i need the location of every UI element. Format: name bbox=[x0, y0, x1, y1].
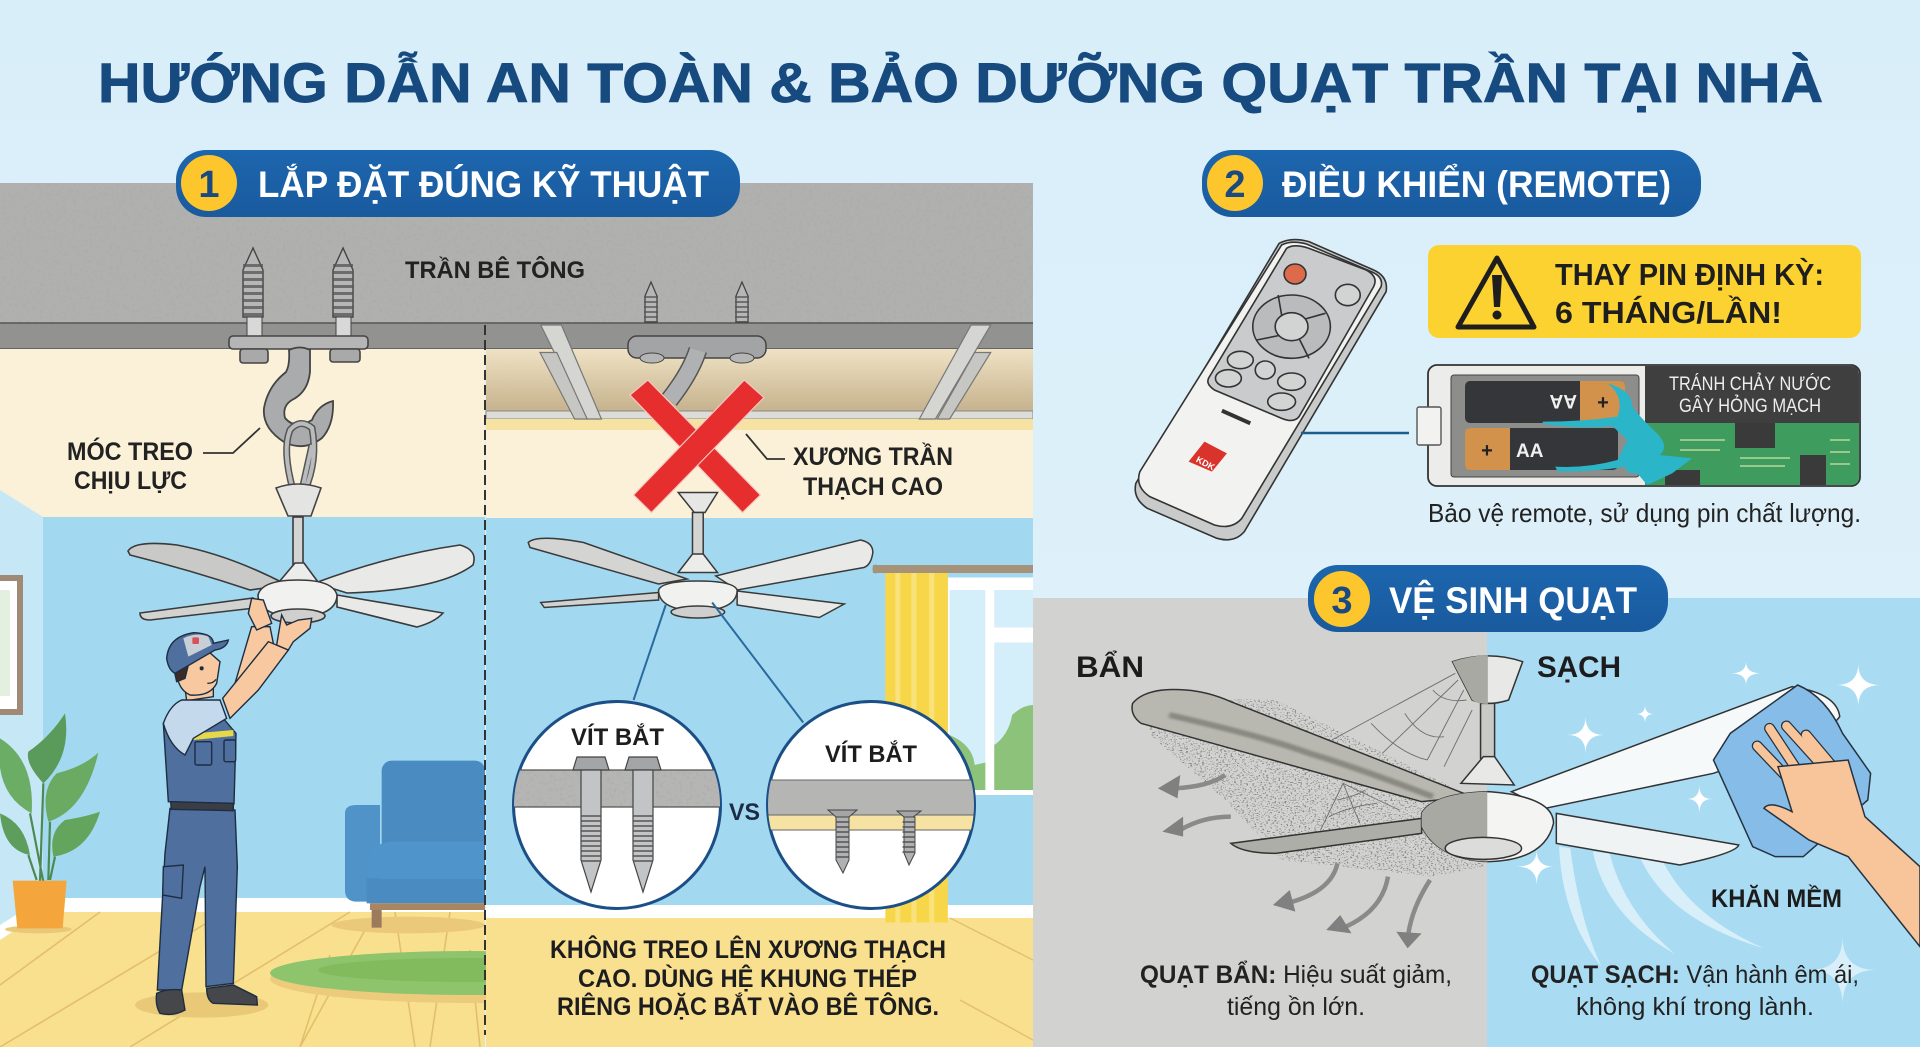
right room: wrong installation bbox=[486, 349, 1033, 1047]
label: screw left: VÍT BẮT bbox=[571, 723, 664, 751]
battery compartment illustration: AA bbox=[1549, 390, 1577, 411]
heading pill 2: ĐIỀU KHIỂN (REMOTE) bbox=[1282, 163, 1671, 205]
bracket and screws on gypsum ceiling bbox=[628, 282, 766, 363]
label: concrete ceiling: TRẦN BÊ TÔNG bbox=[405, 256, 585, 284]
detail circle: screws into concrete bbox=[510, 702, 725, 908]
callout: replace batteries: 6 THÁNG/LẦN! bbox=[1555, 295, 1782, 330]
caption: dirty fan: QUẠT BẨN: Hiệu suất giảm, bbox=[1140, 960, 1452, 989]
heading pill 2: 2 bbox=[1224, 164, 1246, 206]
dirty side background bbox=[1033, 598, 1487, 1047]
callout: replace batteries bbox=[1428, 245, 1861, 338]
remote logo text: KDK bbox=[1194, 454, 1217, 473]
battery compartment illustration: + bbox=[1481, 440, 1493, 462]
sparkles bbox=[1517, 662, 1881, 1005]
warning caption: RIÊNG HOẶC BẮT VÀO BÊ TÔNG. bbox=[557, 991, 939, 1021]
concrete ceiling bbox=[0, 183, 1033, 349]
caption: dirty fan: tiếng ồn lớn. bbox=[1227, 993, 1365, 1021]
cloth and hand bbox=[1713, 685, 1920, 947]
label: screw right: VÍT BẮT bbox=[825, 740, 917, 768]
window with view bbox=[948, 578, 1034, 795]
label: VS: VS bbox=[729, 799, 760, 826]
red prohibition X bbox=[630, 380, 764, 512]
heading pill 1 bbox=[176, 150, 740, 217]
panel: installation scene bbox=[0, 183, 1034, 1047]
wall picture frame bbox=[0, 575, 23, 715]
detail circle: short screws in gypsum bbox=[765, 702, 980, 908]
label: hook bbox=[67, 428, 260, 495]
heading pill 2 bbox=[1202, 150, 1701, 217]
callout: replace batteries: THAY PIN ĐỊNH KỲ: bbox=[1555, 257, 1824, 292]
blue sofa bbox=[332, 761, 485, 933]
dirty arrows bbox=[1158, 775, 1430, 948]
dashed divider bbox=[484, 325, 486, 1035]
remote caption: Bảo vệ remote, sử dụng pin chất lượng. bbox=[1428, 498, 1861, 528]
title: HƯỚNG DẪN AN TOÀN & BẢO DƯỠNG QUẠT TRẦN TẠI NHÀ bbox=[98, 51, 1823, 114]
warning caption: KHÔNG TREO LÊN XƯƠNG THẠCH bbox=[550, 934, 946, 964]
caption: dirty fan bbox=[1140, 960, 1452, 1021]
battery compartment illustration: TRÁNH CHẢY NƯỚC bbox=[1669, 373, 1831, 395]
label: gypsum frame: THẠCH CAO bbox=[803, 473, 943, 501]
remote control bbox=[1135, 240, 1386, 540]
zoom connector lines bbox=[634, 602, 803, 722]
label: gypsum frame bbox=[746, 434, 953, 501]
bent hook stub bbox=[669, 350, 698, 400]
heading pill 3 bbox=[1308, 565, 1668, 632]
heading pill 1: LẮP ĐẶT ĐÚNG KỸ THUẬT bbox=[258, 163, 709, 205]
gypsum metal frame bbox=[540, 325, 991, 419]
warning caption bbox=[550, 934, 946, 1021]
cobweb bbox=[1321, 673, 1472, 830]
battery compartment illustration bbox=[1417, 365, 1860, 486]
caption: clean fan: QUẠT SẠCH: Vận hành êm ái, bbox=[1531, 961, 1859, 989]
clean side background bbox=[1487, 598, 1920, 1047]
ceiling fan left bbox=[128, 517, 474, 627]
dust cloud bbox=[1135, 697, 1483, 877]
caption: clean fan: không khí trong lành. bbox=[1576, 993, 1814, 1021]
airflow swooshes, clean side bbox=[1559, 847, 1764, 967]
yellow curtain and rod bbox=[872, 564, 1034, 922]
label: soft cloth: KHĂN MỀM bbox=[1711, 884, 1842, 913]
cleaning fan bbox=[1132, 655, 1840, 865]
load-bearing hook bbox=[264, 348, 333, 516]
anchor screws in concrete (correct) bbox=[229, 248, 368, 363]
label: hook: MÓC TREO bbox=[67, 436, 193, 466]
label: clean: SẠCH bbox=[1537, 651, 1621, 684]
label: gypsum frame: XƯƠNG TRẦN bbox=[793, 442, 953, 471]
battery compartment illustration: + bbox=[1597, 392, 1609, 414]
warning caption: CAO. DÙNG HỆ KHUNG THÉP bbox=[578, 963, 917, 993]
green rug bbox=[270, 951, 486, 1003]
left room: correct installation bbox=[0, 349, 485, 1047]
connector from remote to battery bay bbox=[1301, 432, 1409, 434]
battery compartment illustration: AA bbox=[1516, 441, 1544, 462]
caption: clean fan bbox=[1531, 961, 1859, 1021]
battery compartment illustration: GÂY HỎNG MẠCH bbox=[1679, 395, 1821, 417]
panel: cleaning comparison bbox=[1033, 598, 1920, 1047]
heading pill 3: VỆ SINH QUẠT bbox=[1389, 579, 1637, 621]
label: hook: CHỊU LỰC bbox=[74, 467, 187, 495]
ceiling fan right bbox=[528, 492, 873, 618]
plant in orange pot bbox=[0, 713, 100, 933]
heading pill 1: 1 bbox=[198, 164, 220, 206]
label: dirty: BẨN bbox=[1076, 650, 1144, 684]
heading pill 3: 3 bbox=[1331, 580, 1353, 622]
technician bbox=[135, 598, 312, 1018]
